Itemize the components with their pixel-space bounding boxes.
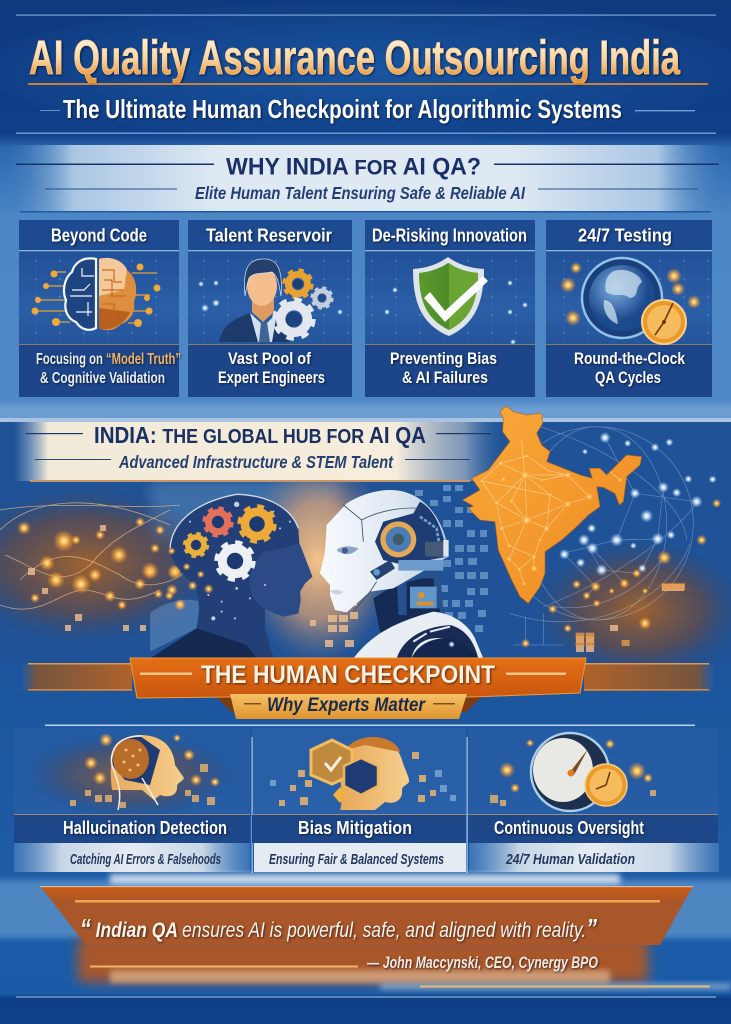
tiles: warm bbox=[28, 525, 684, 652]
icon: globe with clock bbox=[560, 258, 701, 344]
map: india bbox=[463, 406, 642, 603]
icon: head with hex shields bbox=[311, 737, 409, 810]
caption: 24/7 Human Validation bbox=[505, 852, 635, 868]
gears on human head bbox=[185, 508, 273, 578]
panel: hallucination detection bbox=[14, 728, 250, 872]
tiles: blue bbox=[415, 485, 488, 647]
icon: engineer with gears bbox=[198, 259, 343, 342]
hero scene background bbox=[0, 418, 731, 680]
panel: quote bbox=[0, 874, 731, 998]
banner: the human checkpoint bbox=[22, 658, 714, 719]
card: de-risking innovation: & AI Failures bbox=[402, 369, 488, 387]
panel: continuous oversight bbox=[466, 728, 719, 873]
quote text: “ Indian QA ensures AI is powerful, safe, and aligned with reality.” bbox=[80, 913, 597, 943]
section band: why india bbox=[0, 145, 731, 212]
heading: Bias Mitigation bbox=[298, 818, 412, 838]
heading: Talent Reservoir bbox=[206, 224, 332, 246]
icon: brain bbox=[32, 258, 160, 330]
heading: Hallucination Detection bbox=[63, 818, 227, 838]
illustration: human profile with gears bbox=[144, 494, 312, 658]
subheading: why india: Elite Human Talent Ensuring Safe & Reliable AI bbox=[195, 183, 526, 203]
heading: Beyond Code bbox=[51, 224, 147, 246]
heading: Continuous Oversight bbox=[494, 818, 644, 838]
network lines left bbox=[0, 503, 200, 609]
subheading: infrastructure: Advanced Infrastructure & STEM Talent bbox=[118, 452, 394, 472]
subheading: Why Experts Matter bbox=[267, 695, 426, 716]
heading: global hub: INDIA: THE GLOBAL HUB FOR AI QA bbox=[94, 422, 426, 448]
panel: bias mitigation bbox=[252, 728, 466, 873]
heading: THE HUMAN CHECKPOINT bbox=[201, 661, 495, 689]
caption: Round-the-Clock bbox=[574, 350, 686, 368]
icon: shield with check bbox=[384, 257, 528, 345]
heading: De-Risking Innovation bbox=[372, 224, 527, 246]
card: 24/7 testing bbox=[546, 220, 712, 397]
sub ribbon bbox=[230, 694, 467, 719]
card: beyond code: & Cognitive Validation bbox=[40, 370, 165, 387]
caption: Vast Pool of bbox=[228, 350, 311, 368]
heading: why india: WHY INDIA FOR AI QA? bbox=[226, 154, 481, 180]
card: beyond code bbox=[19, 220, 181, 397]
icon: gauge and clock bbox=[531, 733, 627, 811]
card: talent reservoir bbox=[188, 220, 352, 397]
caption: Focusing on “Model Truth” bbox=[36, 351, 181, 368]
network right bbox=[500, 427, 721, 648]
caption: Catching AI Errors & Falsehoods bbox=[70, 852, 221, 868]
caption: Ensuring Fair & Balanced Systems bbox=[269, 852, 444, 868]
attribution: — John Maccynski, CEO, Cynergy BPO bbox=[366, 953, 598, 972]
card: de-risking innovation bbox=[365, 220, 535, 397]
header panel bbox=[0, 0, 731, 140]
caption: Preventing Bias bbox=[390, 350, 497, 368]
card: 24/7 testing: QA Cycles bbox=[595, 369, 661, 387]
panel: india banner bbox=[14, 422, 504, 482]
card: talent reservoir: Expert Engineers bbox=[218, 369, 325, 387]
icon: head with neural brain bbox=[111, 735, 184, 810]
illustration: robot profile bbox=[320, 490, 483, 658]
heading: 24/7 Testing bbox=[578, 224, 672, 246]
